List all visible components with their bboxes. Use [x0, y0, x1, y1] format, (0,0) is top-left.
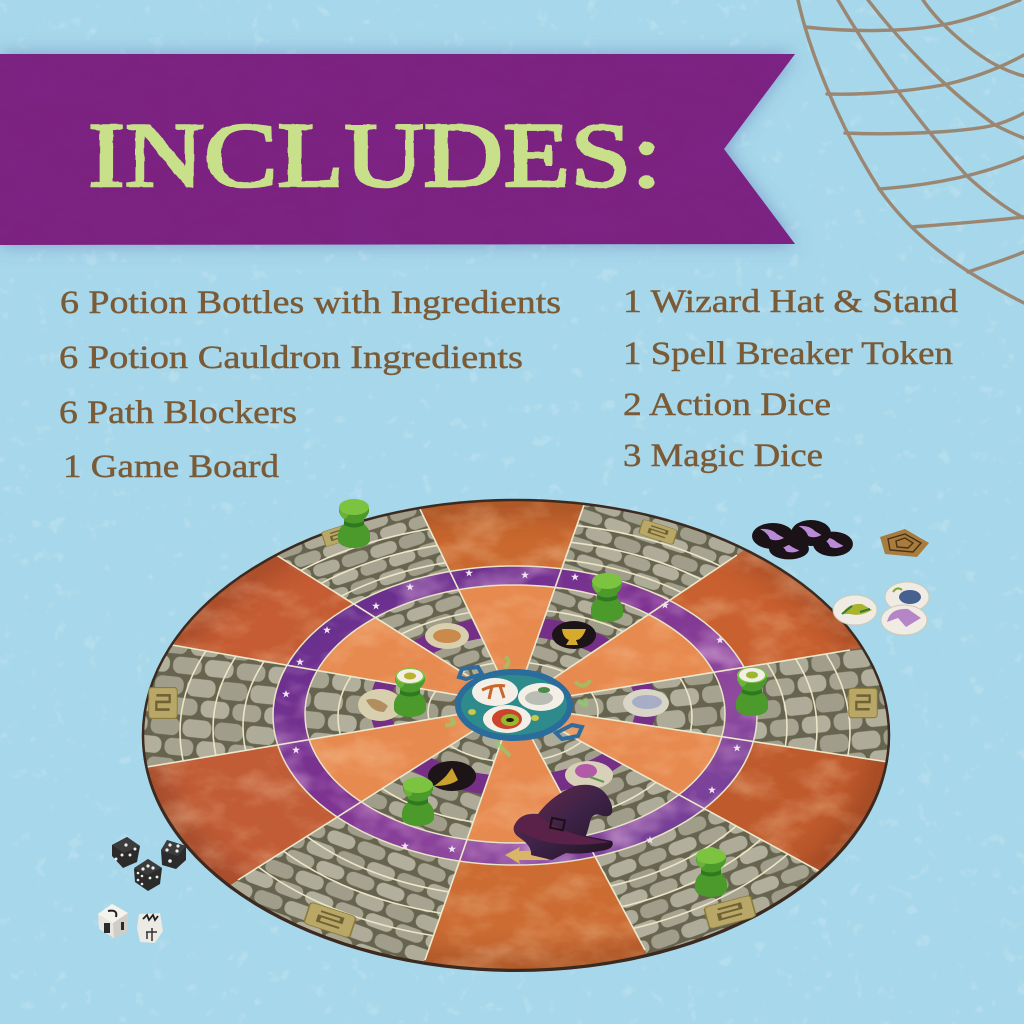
cauldron token 2 [518, 683, 564, 711]
list: right column [623, 284, 959, 474]
board rim [143, 500, 889, 970]
spider web decoration [798, 0, 1024, 303]
peg: blocker top left [338, 499, 370, 548]
list: right column: 1 Spell Breaker Token [623, 336, 953, 372]
ring stars [282, 569, 741, 852]
ingredient tokens [833, 582, 929, 635]
die 2 [134, 859, 162, 891]
action dice: black [112, 837, 186, 891]
list: right column: 3 Magic Dice [623, 438, 823, 474]
peg: blocker lower left [402, 777, 434, 826]
spell breaker token [880, 529, 929, 557]
stone track arcs [180, 522, 850, 942]
spokes [147, 505, 888, 960]
list: left column: 6 Potion Bottles with Ingredients [60, 285, 561, 321]
list: right column: 1 Wizard Hat & Stand [623, 284, 959, 320]
cauldron token 1 [472, 678, 518, 706]
stone wedges [144, 505, 888, 962]
die 5 [137, 913, 163, 943]
list: left column [59, 285, 561, 485]
cauldron token 3 [483, 705, 531, 733]
list: left column: 6 Potion Cauldron Ingredients [59, 340, 523, 376]
die 1 [112, 837, 140, 868]
arrow on ring [505, 847, 548, 864]
cauldron [445, 657, 590, 756]
list: right column: 2 Action Dice [623, 387, 831, 423]
game board [142, 498, 890, 972]
gold tiles [149, 519, 877, 938]
title: INCLUDES: [88, 104, 662, 206]
die 4 [98, 904, 128, 938]
magic dice: white [98, 904, 163, 943]
inner orange field [303, 583, 727, 845]
peg: blocker right with token [736, 667, 768, 716]
peg: blocker left with token [394, 668, 426, 717]
purple ring [270, 560, 760, 870]
die 3 [161, 840, 186, 869]
wizard hat [514, 785, 613, 860]
peg: blocker lower right [695, 848, 727, 897]
board tokens [358, 621, 669, 791]
rim shading [143, 500, 889, 970]
peg: blocker top [591, 573, 623, 622]
list: left column: 1 Game Board [63, 449, 280, 485]
outer orange wedges [148, 501, 886, 969]
list: left column: 6 Path Blockers [59, 395, 297, 431]
wizard hat tokens [752, 520, 853, 559]
banner [0, 54, 800, 246]
